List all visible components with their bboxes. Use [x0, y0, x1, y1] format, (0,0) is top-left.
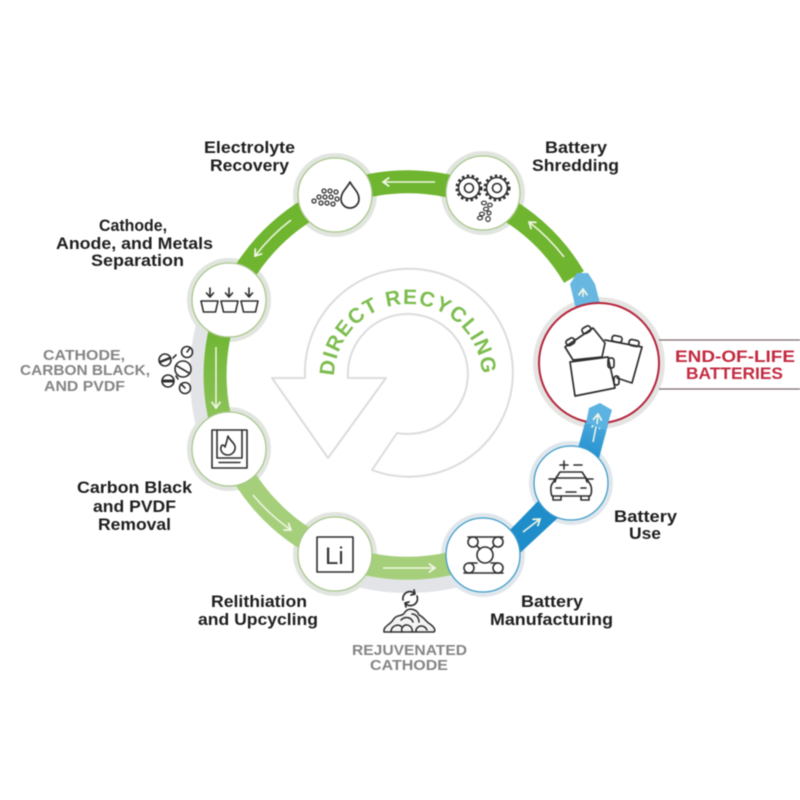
node: battery shredding: [446, 156, 520, 230]
label: cathode anode metals separation: Anode, and Metals: [56, 235, 213, 253]
icon: cathode powder pile: [384, 609, 435, 632]
label: cathode anode metals separation: Cathode,: [99, 217, 167, 235]
label: relithiation and upcycling: [198, 593, 318, 629]
gray halo bands behind ring: [203, 320, 483, 580]
label: battery manufacturing: Manufacturing: [490, 611, 613, 629]
callout: end-of-life batteries: [659, 340, 800, 389]
icon: separated particles: [159, 346, 192, 394]
label: battery use: Use: [629, 525, 661, 543]
icon: three bins with arrows: [201, 288, 258, 312]
icon: shredding gears: [457, 176, 509, 222]
center arrow: direct recycling: DIRECT RECYCLING: [318, 288, 496, 376]
label: battery shredding: Battery: [545, 139, 608, 157]
label: carbon black removal: [77, 479, 193, 534]
label: battery use: Battery: [614, 508, 678, 526]
node: end-of-life batteries: [539, 303, 659, 430]
blue segment overlapping circle: [586, 403, 612, 430]
icon: electric car: [549, 461, 593, 500]
label: rejuvenated cathode: CATHODE: [370, 658, 448, 674]
label: electrolyte recovery: [204, 139, 295, 175]
label: cathode, carbon black, pvdf: AND PVDF: [44, 379, 125, 395]
icon: lithium element box: Li: [325, 543, 344, 570]
label: battery use: [614, 508, 678, 543]
node: electrolyte recovery: [298, 158, 372, 232]
center arrow: direct recycling: [270, 268, 514, 478]
label: carbon black removal: Carbon Black: [77, 479, 193, 497]
label: rejuvenated cathode: REJUVENATED: [352, 643, 467, 659]
node: battery use: [534, 446, 608, 520]
node: relithiation: [298, 517, 372, 591]
icon: stacked batteries: [565, 325, 642, 396]
label: battery manufacturing: [490, 593, 613, 629]
label: cathode, carbon black, pvdf: [20, 348, 150, 395]
node: carbon black removal: [192, 412, 266, 486]
label: relithiation and upcycling: Relithiation: [211, 593, 307, 611]
arrow inside blue segment: [597, 414, 598, 424]
label: battery shredding: Shredding: [532, 157, 619, 175]
label: battery shredding: [532, 139, 619, 175]
label: rejuvenated cathode: [352, 643, 467, 674]
label: cathode, carbon black, pvdf: CARBON BLACK,: [20, 363, 150, 379]
callout: end-of-life batteries: END-OF-LIFE: [675, 347, 795, 366]
node: separation: [192, 263, 266, 337]
label: electrolyte recovery: Electrolyte: [204, 139, 295, 157]
icon: conveyor belts: [464, 537, 503, 573]
label: relithiation and upcycling: and Upcycling: [198, 611, 318, 629]
icon: furnace: [212, 430, 247, 468]
flow arrows: [216, 182, 597, 568]
label: electrolyte recovery: Recovery: [210, 157, 290, 175]
blue battery-use segments: [507, 273, 612, 553]
icon: particles and drop: [312, 182, 359, 208]
callout: end-of-life batteries: BATTERIES: [686, 364, 783, 383]
label: battery manufacturing: Battery: [521, 593, 584, 611]
label: cathode anode metals separation: Separation: [91, 252, 184, 270]
icon: refresh arrows: [403, 590, 418, 607]
node halos: [187, 151, 665, 597]
label: cathode anode metals separation: [56, 217, 213, 270]
label: cathode, carbon black, pvdf: CATHODE,: [43, 348, 125, 364]
node: battery manufacturing: [446, 518, 520, 592]
label: carbon black removal: Removal: [98, 516, 171, 534]
green process ring: [215, 182, 574, 568]
label: carbon black removal: and PVDF: [93, 498, 176, 516]
